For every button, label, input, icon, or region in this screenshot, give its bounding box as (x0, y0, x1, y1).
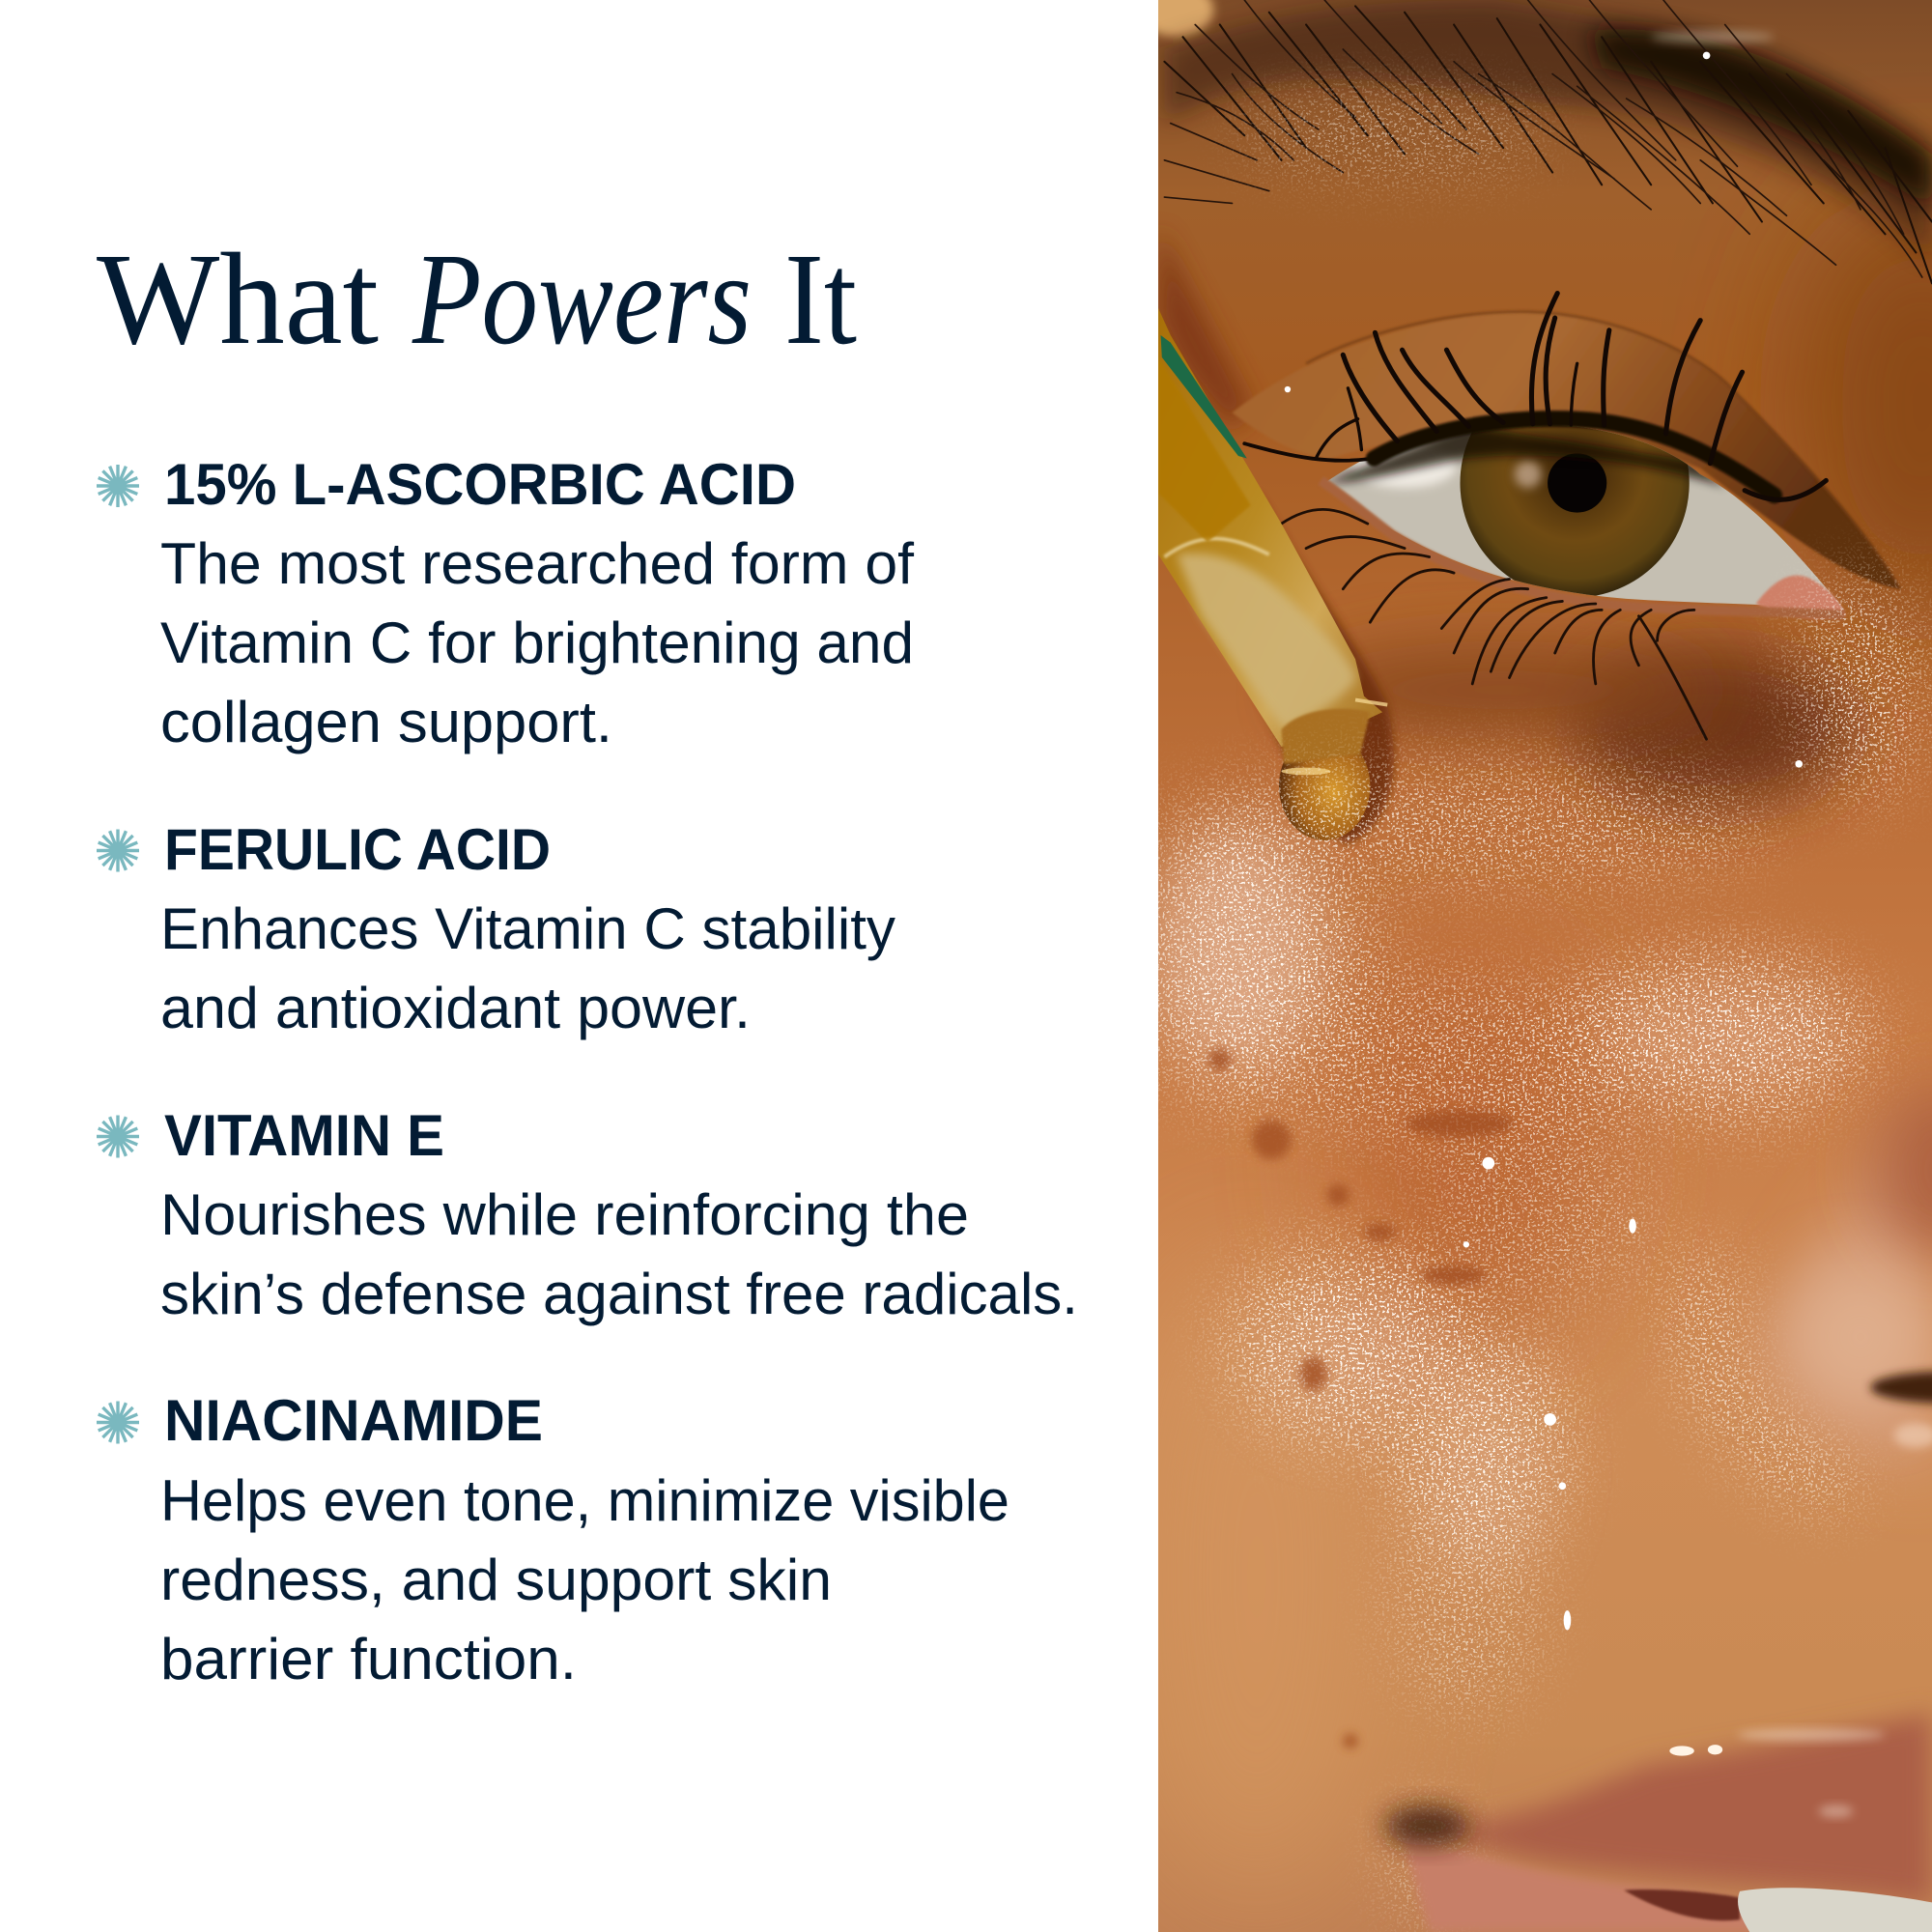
description (160, 896, 895, 1040)
description (160, 1182, 1078, 1326)
description: skin’s defense against free radicals. (160, 1262, 1078, 1326)
icon: teal starburst (97, 465, 139, 507)
lip glints (1669, 1729, 1886, 1817)
iris and pupil (1329, 425, 1724, 595)
blemishes (1208, 1048, 1515, 1748)
skin base (1158, 0, 1932, 1932)
label: VITAMIN E (164, 1103, 444, 1168)
title (97, 227, 857, 372)
eyebrow (1164, 0, 1932, 283)
description: Helps even tone, minimize visible (160, 1468, 1009, 1533)
description: barrier function. (160, 1627, 577, 1691)
description (160, 1468, 1009, 1691)
skin shading (1133, 0, 1932, 1897)
skin sparkle highlights (1158, 0, 1932, 1932)
description: and antioxidant power. (160, 976, 751, 1040)
description: Nourishes while reinforcing the (160, 1182, 969, 1247)
dropper (1158, 308, 1387, 840)
ingredient: vitamin E (97, 1103, 1078, 1326)
ingredient: 15% L-ascorbic acid (97, 452, 914, 754)
ingredient: niacinamide (97, 1388, 1009, 1691)
upper lip (1430, 1713, 1932, 1904)
sclera (1324, 424, 1844, 610)
bright glints (1285, 52, 1803, 1630)
icon: teal starburst (97, 1115, 139, 1157)
icon: teal starburst (97, 1401, 139, 1443)
lower eyelashes (1282, 509, 1707, 739)
description: Vitamin C for brightening and (160, 611, 914, 675)
label: NIACINAMIDE (164, 1388, 543, 1453)
title: Powers (412, 227, 752, 372)
lower lid rim (1321, 480, 1844, 614)
lower lip (1403, 1836, 1756, 1932)
description: Enhances Vitamin C stability (160, 896, 895, 961)
mouth corner (1385, 1806, 1468, 1846)
ingredient: ferulic acid (97, 817, 895, 1040)
eyelid (1233, 312, 1900, 589)
description: The most researched form of (160, 531, 914, 596)
label: FERULIC ACID (164, 817, 551, 882)
panel: ingredients text (97, 227, 1078, 1691)
title: It (784, 227, 857, 372)
dropper shadow (1264, 535, 1399, 848)
eye (1319, 425, 1847, 620)
icon: teal starburst (97, 829, 139, 871)
mouth (1385, 1713, 1932, 1932)
description (160, 531, 914, 754)
caruncle (1756, 576, 1846, 618)
title: What (97, 227, 379, 372)
mouth line (1624, 1889, 1740, 1920)
upper eyelashes (1244, 294, 1826, 499)
label: 15% L-ASCORBIC ACID (164, 452, 796, 517)
eyelid crease (1306, 312, 1900, 589)
nostril (1870, 1372, 1932, 1404)
teeth (1738, 1888, 1932, 1932)
nose (1768, 1084, 1932, 1479)
panel: close-up photo illustration of eye and dropper (1133, 0, 1932, 1932)
description: collagen support. (160, 690, 612, 754)
description: redness, and support skin (160, 1548, 832, 1612)
